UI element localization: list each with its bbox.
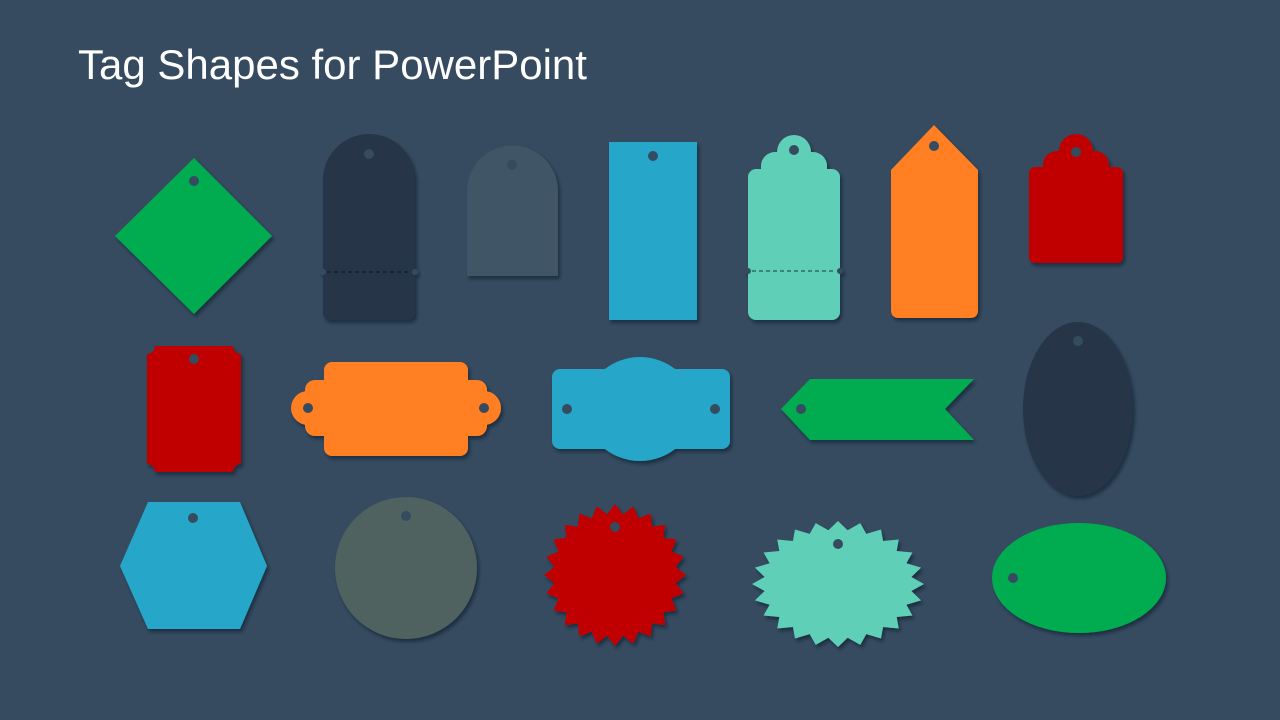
tag: green horizontal oval (992, 523, 1166, 633)
tag: orange with side lobes (291, 362, 501, 456)
tag: red notched rectangle (147, 346, 241, 472)
tag: navy oval (1023, 322, 1133, 496)
tag: gray arch (467, 146, 558, 276)
tag: navy arch with perforation (320, 134, 418, 320)
tag: teal stepped with perforation (745, 135, 843, 320)
tag: teal oval starburst (752, 521, 924, 647)
tag: red stepped (1029, 134, 1123, 263)
title: Tag Shapes for PowerPoint (78, 41, 587, 88)
tag: blue rectangle (609, 142, 697, 320)
tag: blue with oval (552, 357, 730, 461)
tag: green arrow flag (781, 379, 974, 440)
tag: blue hexagon (120, 502, 267, 629)
tag: red starburst (544, 504, 686, 646)
tag: gray circle (335, 497, 477, 639)
tag: green diamond (115, 158, 272, 314)
tag: orange pointed (891, 125, 978, 318)
